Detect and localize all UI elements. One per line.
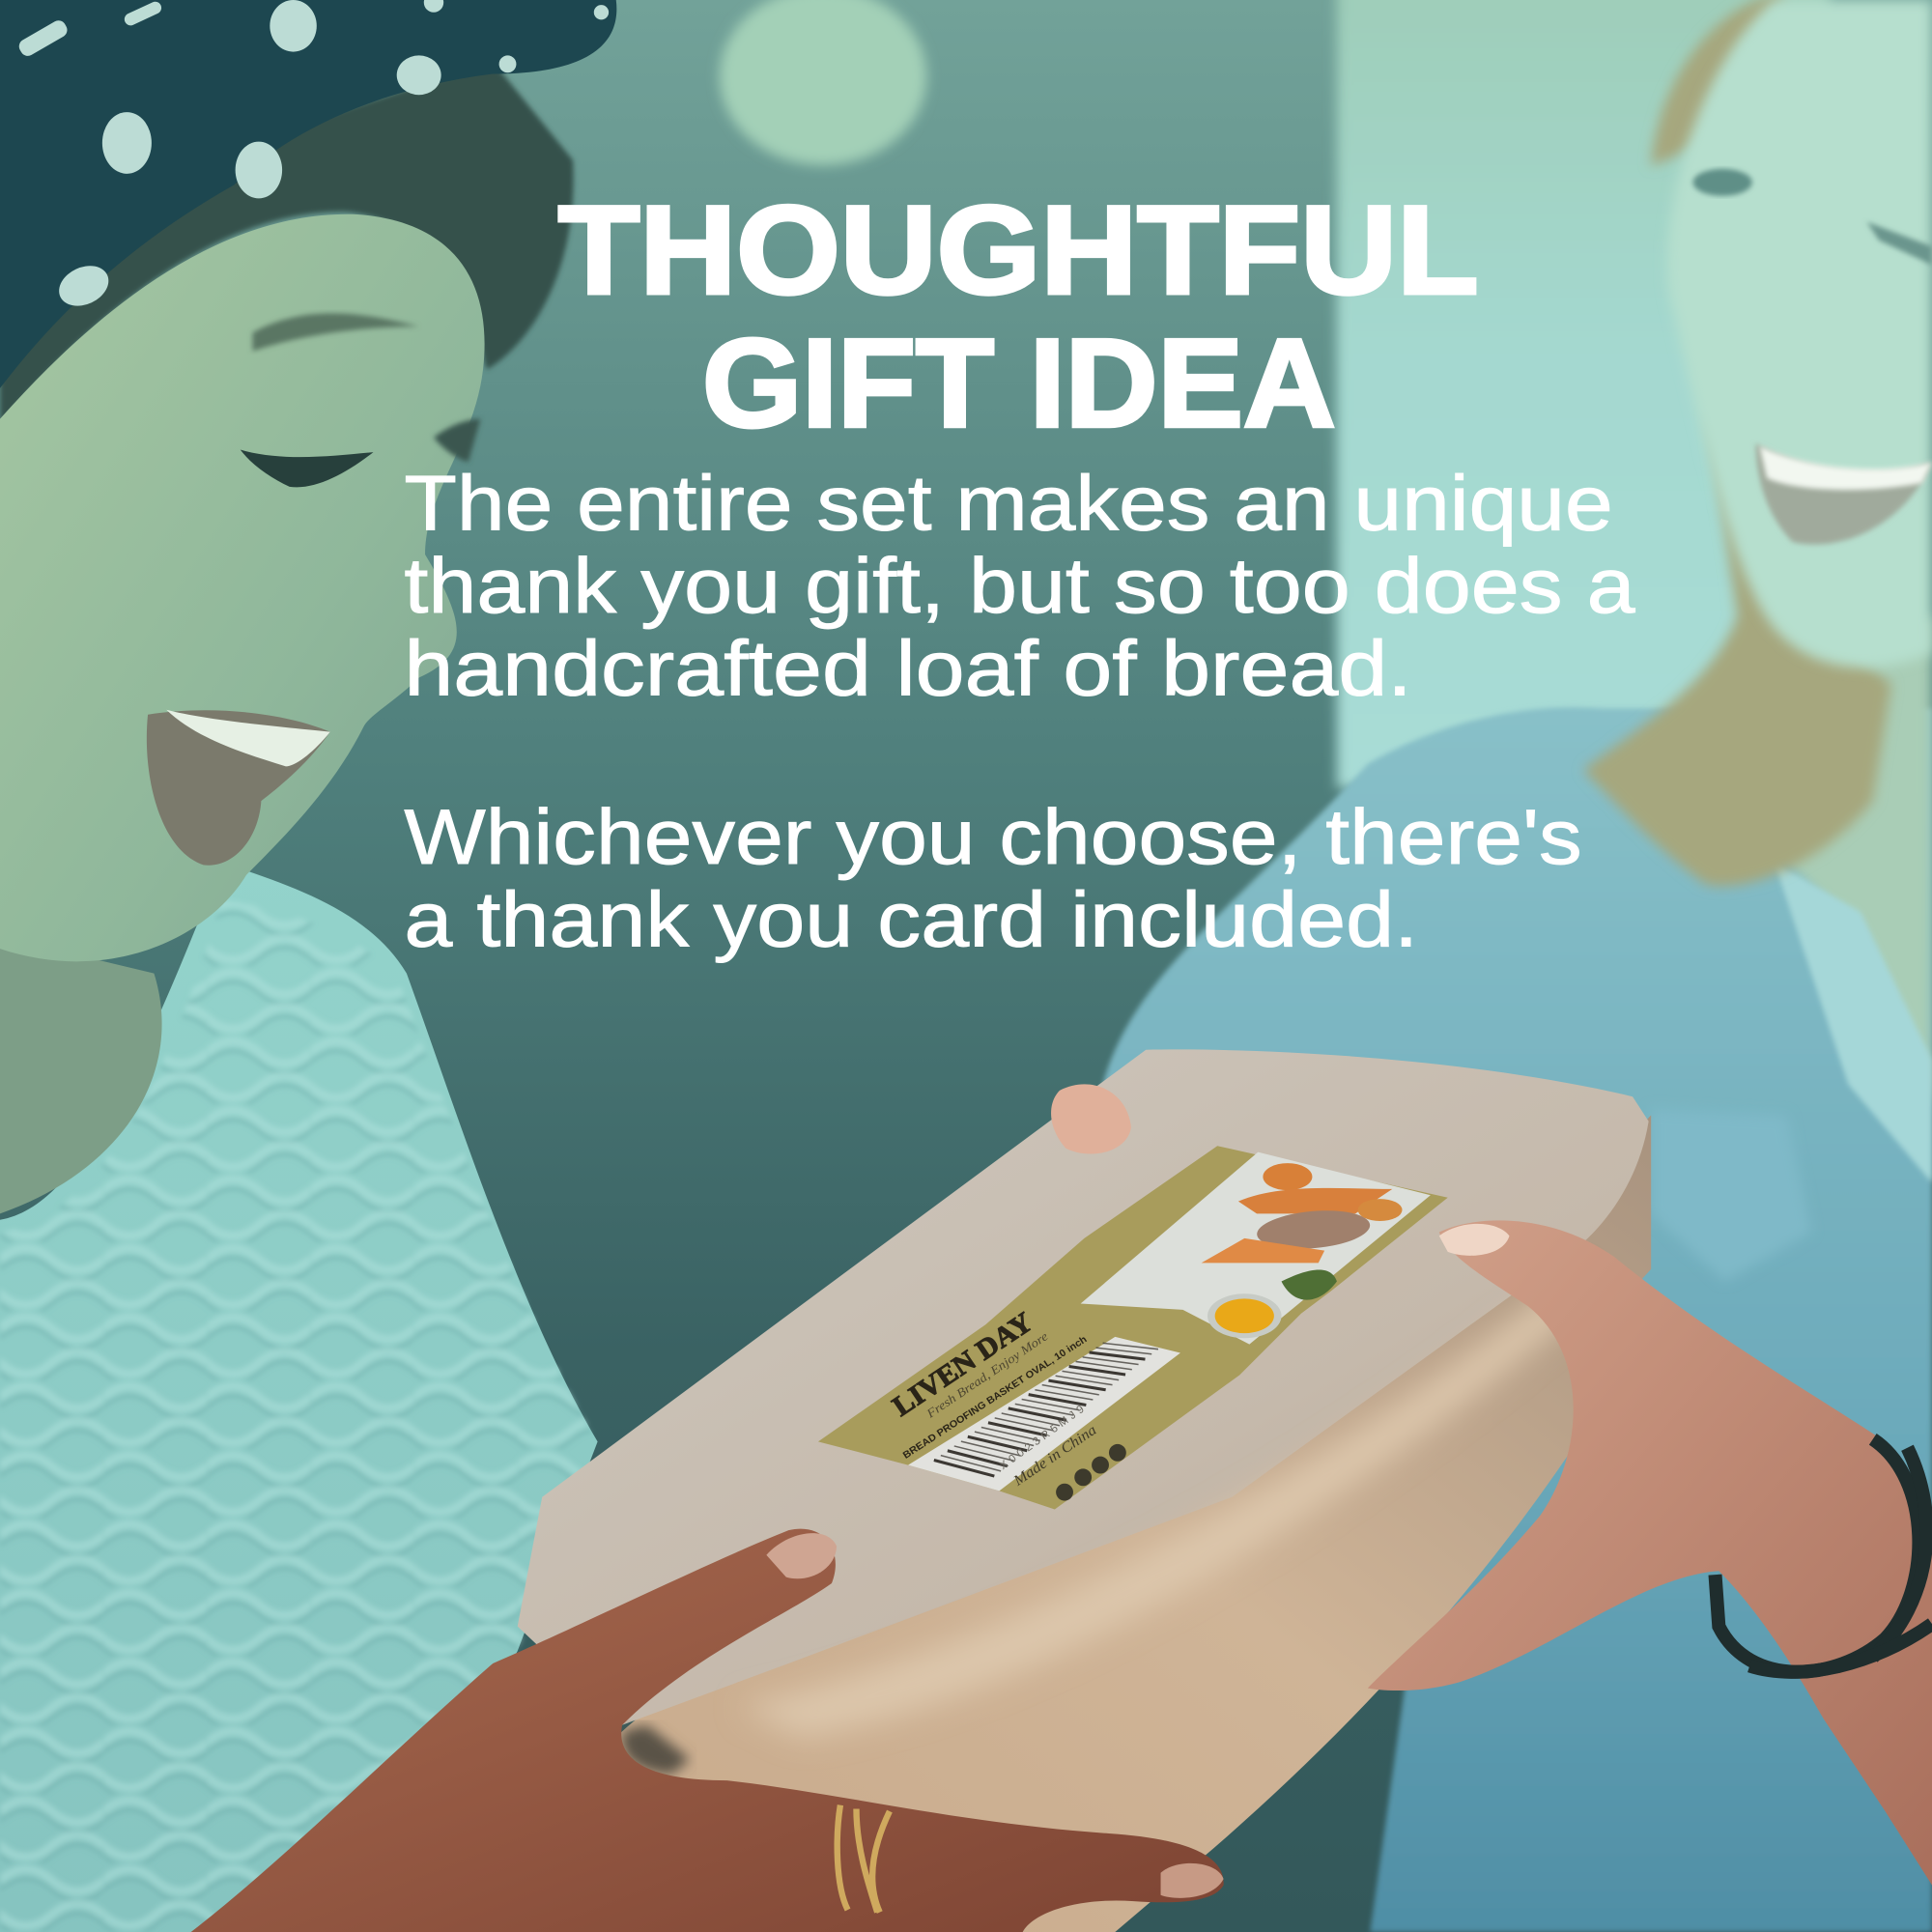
- denim shirt: [1103, 707, 1932, 1932]
- box top face: [518, 1049, 1649, 1725]
- title: THOUGHTFUL: [558, 180, 1479, 321]
- label product line: BREAD PROOFING BASKET OVAL, 10 inch: [901, 1334, 1089, 1462]
- body text: thank you card: a thank you card included.: [404, 877, 1418, 964]
- box side face: [616, 1115, 1651, 1932]
- eyes and smile: [1693, 169, 1752, 196]
- label made in china: Made in China: [1009, 1422, 1100, 1490]
- gold ring: [838, 1805, 890, 1913]
- back hand finger: [1051, 1084, 1131, 1154]
- shirt: [0, 863, 598, 1932]
- headscarf: [0, 0, 616, 388]
- title: [558, 180, 1479, 453]
- title: GIFT IDEA: [702, 312, 1336, 453]
- hair: [0, 62, 574, 425]
- label brand text: LIVEN DAY: [887, 1307, 1038, 1423]
- body text: thank you card: [404, 794, 1582, 964]
- bracelet: [1716, 1439, 1932, 1672]
- eye and brow: [241, 450, 373, 487]
- food photo: [1202, 1163, 1403, 1338]
- body text: thank you card: Whichever you choose, there's: [404, 794, 1582, 881]
- shirt collar: [1775, 863, 1932, 1182]
- mouth: [147, 710, 330, 866]
- white card: [1081, 1152, 1431, 1345]
- face: [0, 214, 485, 961]
- neck: [1775, 616, 1932, 1109]
- body text: gift description: handcrafted loaf of bread.: [404, 625, 1412, 712]
- barcode stripes: [934, 1343, 1158, 1476]
- gift package: [518, 1049, 1651, 1932]
- neck: [0, 936, 162, 1213]
- barcode number: X0023R5MJ9: [998, 1404, 1087, 1472]
- woman on the left: [0, 0, 616, 1932]
- label social icons: [1056, 1444, 1126, 1501]
- shirt texture: [0, 899, 598, 1932]
- package label: [818, 1146, 1448, 1509]
- body text: gift description: thank you gift, but so too does a: [404, 543, 1635, 630]
- scarf dots: [16, 0, 609, 314]
- body text: gift description: [404, 460, 1635, 712]
- face: [1667, 0, 1932, 668]
- kraft label background: [818, 1146, 1448, 1509]
- left hand with ring: [191, 1529, 1224, 1932]
- body text: gift description: The entire set makes an unique: [404, 460, 1613, 547]
- label tagline: Fresh Bread, Enjoy More: [923, 1329, 1051, 1421]
- woman on the right: [1103, 0, 1932, 1932]
- barcode panel: [908, 1337, 1180, 1491]
- right hand with bracelet: [1368, 1220, 1932, 1886]
- box dark rim: [622, 1725, 690, 1775]
- hair: [1583, 0, 1891, 886]
- box soft highlight: [739, 1269, 1583, 1737]
